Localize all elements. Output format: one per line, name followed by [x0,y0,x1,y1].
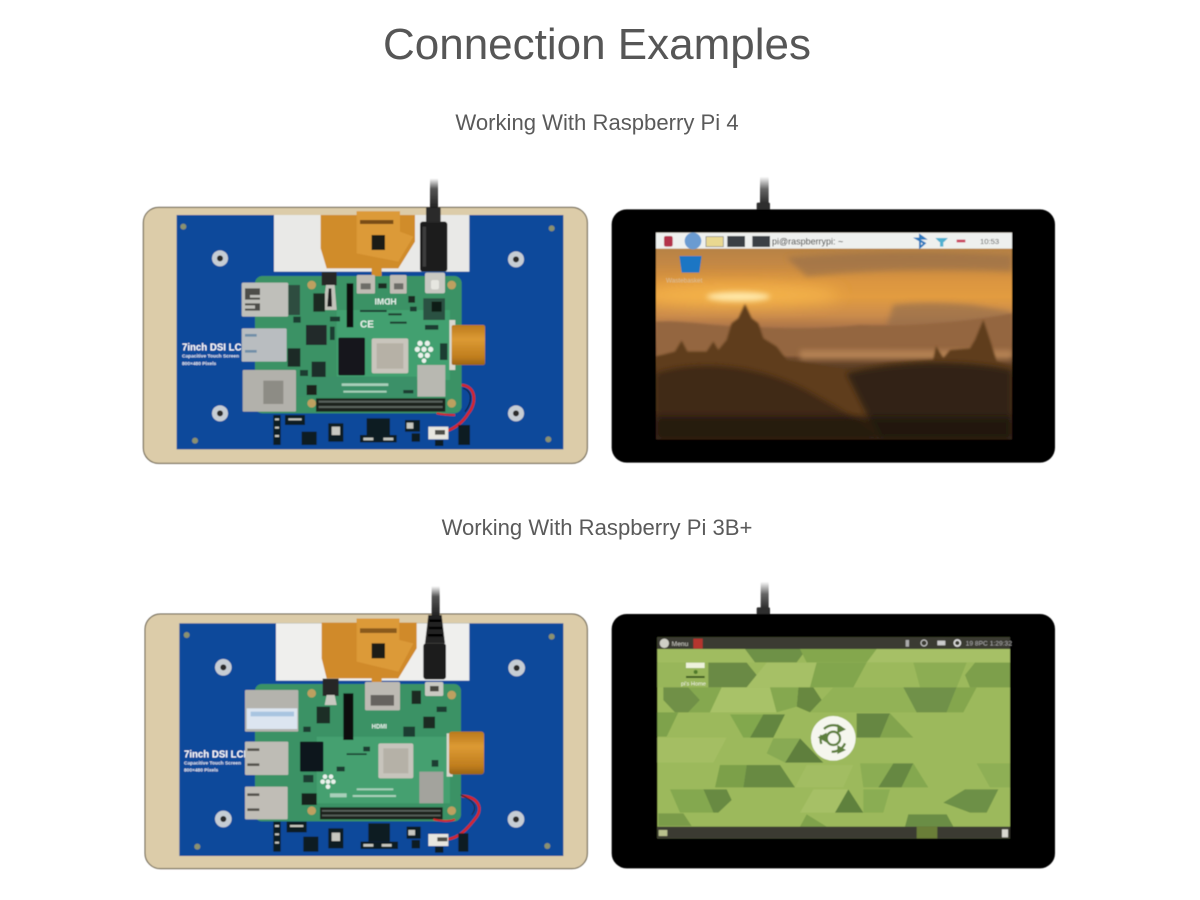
heading: Raspberry Pi 3B+: Working With Raspberry Pi 3B+ [442,515,752,540]
panel: Pi 4 mounted on back of display: HDMI [375,296,397,306]
panel: Pi 3B+ mounted on back of display: 800×480 Pixels [184,768,219,774]
panel: display front showing Ubuntu MATE desktop: Menu [672,641,689,648]
panel: display front showing Raspberry Pi desktop [612,177,1055,463]
title: Connection Examples [383,20,811,69]
panel: Pi 4 mounted on back of display [143,178,587,463]
panel: Pi 4 mounted on back of display: 800×480 Pixels [182,361,217,367]
heading: Raspberry Pi 4: Working With Raspberry Pi 4 [455,110,739,135]
panel: display front showing Ubuntu MATE desktop [612,582,1055,868]
panel: display front showing Ubuntu MATE desktop: 19 8PC 1:29:32 [966,641,1012,648]
panel: Pi 4 mounted on back of display: Capacitive Touch Screen [182,354,239,360]
panel: display front showing Raspberry Pi desktop: pi@raspberrypi: ~ [772,237,843,247]
panel: display front showing Raspberry Pi desktop: Wastebasket [666,278,703,285]
panel: display front showing Raspberry Pi desktop: 10:53 [980,237,999,246]
panel: Pi 3B+ mounted on back of display [145,586,587,869]
panel: Pi 3B+ mounted on back of display: Capacitive Touch Screen [184,760,241,766]
panel: Pi 3B+ mounted on back of display: 7inch DSI LCD [184,750,251,761]
panel: Pi 4 mounted on back of display: 7inch DSI LCD [182,343,249,354]
panel: Pi 4 mounted on back of display: CE [360,319,374,330]
panel: display front showing Ubuntu MATE desktop: pi's Home [681,681,706,687]
panel: Pi 3B+ mounted on back of display: HDMI [372,725,387,731]
